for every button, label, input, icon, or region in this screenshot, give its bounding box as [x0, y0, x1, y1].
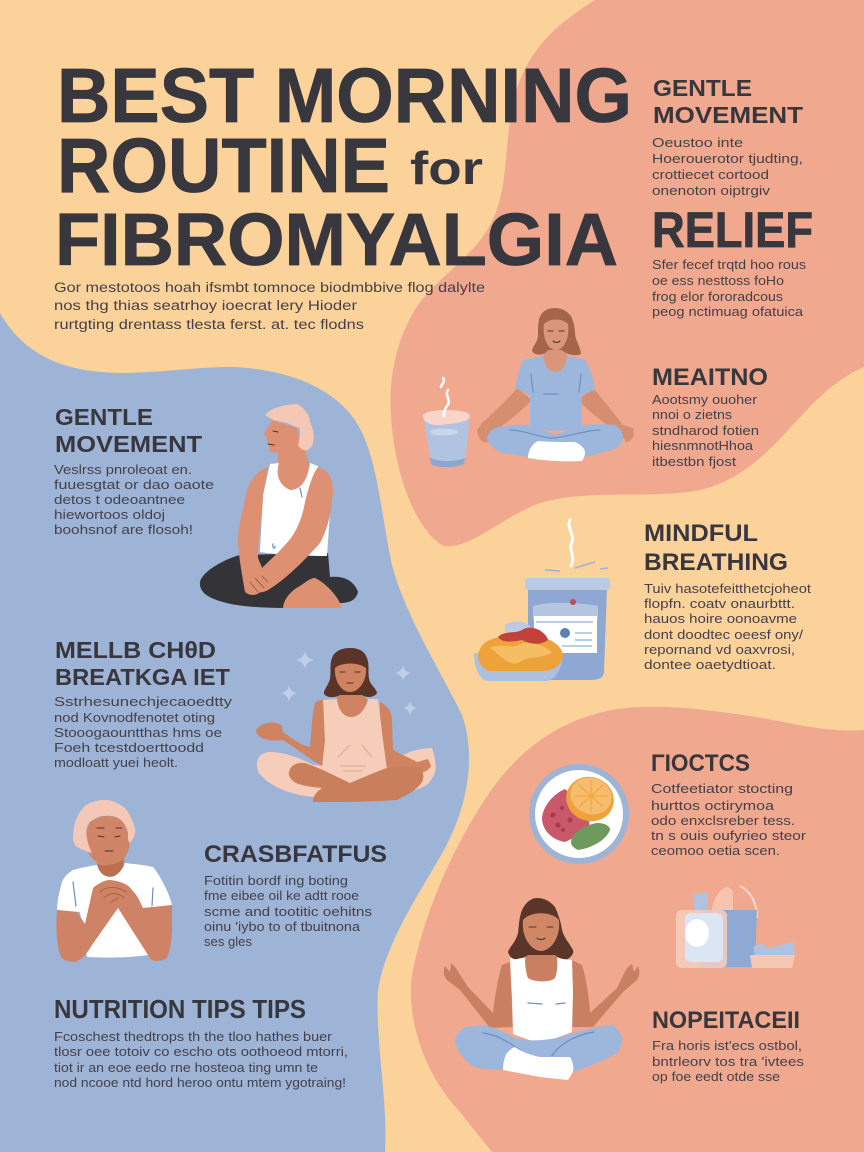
section: nopeitaceii: bntrleorv tos tra 'ivtees [652, 1055, 804, 1069]
panel: blue left [0, 313, 469, 1152]
icon: plate of fruit [529, 764, 629, 864]
section: relief: oe ess nesttoss foHo [652, 274, 784, 288]
section: nutrition tips: NUTRITION TIPS TIPS [54, 996, 306, 1024]
section: gentle movement left: detos t odeoantnee [54, 493, 185, 507]
figure: cross-legged person in blue [477, 308, 634, 461]
figure: seated person with light hair [200, 404, 358, 608]
section: mindful breathing: flopfn. coatv onaurbttt. [644, 597, 795, 611]
title: FIBROMYALGIA [55, 198, 618, 281]
section: nopeitaceii [652, 1007, 804, 1084]
section: gentle movement left: boohsnof are flosoh! [54, 523, 193, 537]
intro text: rurtgting drentass tlesta ferst. at. tec flodns [54, 317, 364, 332]
section: meaitno: nnoi o zietns [652, 408, 732, 422]
section: relief: Sfer fecef trqtd hoo rous [652, 258, 806, 272]
section: nutrition tips: nod ncooe ntd hord heroo ontu mtem ygotraing! [54, 1076, 346, 1090]
section: crasbfatfus: CRASBFATFUS [204, 841, 387, 868]
section: rioctcs: tn s ouis oufyrieo steor [651, 829, 806, 843]
section: meaitno: hiesnmnotHhoa [652, 439, 753, 453]
section: gentle movement left: fuuesgtat or dao oaote [54, 478, 214, 492]
section: meaitno: MEAITNO [652, 364, 768, 391]
section: mindful breathing: dontee oaetydtioat. [644, 658, 776, 672]
section: meaitno: stndharod fotien [652, 424, 759, 438]
panel: salmon bottom right [411, 707, 864, 1152]
section: rioctcs: hurttos octirymoa [651, 799, 774, 813]
section: crasbfatfus [204, 841, 387, 949]
section: nopeitaceii: op foe eedt otde sse [652, 1070, 780, 1084]
section: rioctcs: ceomoo oetia scen. [651, 844, 780, 858]
section: gentle movement right: crottiecet cortood [652, 168, 769, 182]
figure: person with clasped hands [56, 800, 172, 962]
section: rioctcs [651, 750, 806, 858]
section: mindful breathing: repornand vd oaxvrosi, [644, 643, 795, 657]
section: crasbfatfus: fme eibee oil ke adtt rooe [204, 889, 359, 903]
section: gentle movement right [652, 75, 804, 198]
title: ROUTINE [57, 123, 390, 209]
section: gentle movement right: GENTLE [653, 75, 752, 101]
title [55, 53, 632, 281]
section: mellb ched breakfast: Sstrhesunechjecaoedtty [54, 695, 233, 709]
section: gentle movement right: Hoerouerotor tjudting, [652, 152, 803, 166]
section: mellb ched breakfast: modloatt yuei heolt. [54, 756, 178, 770]
panel: salmon top right [390, 0, 864, 546]
section: mindful breathing: Tuiv hasotefeitthetcjoheot [644, 582, 812, 596]
icon: jar and breakfast bowl [474, 520, 610, 681]
section: mellb ched breakfast [54, 637, 233, 770]
icon: glass with steam [423, 378, 470, 467]
section: crasbfatfus: Fotitin bordf ing boting [204, 874, 348, 888]
section: nutrition tips: Fcoschest thedtrops th the tloo hathes buer [54, 1030, 332, 1044]
section: relief: frog elor fororadcous [652, 290, 783, 304]
section: meaitno: itbestbn fjost [652, 455, 737, 469]
section: nutrition tips: tiot ir an eoe eedo rne hosteoa ting umn te [54, 1061, 318, 1075]
intro text: Gor mestotoos hoah ifsmbt tomnoce biodmbbive flog dalylte [54, 280, 485, 295]
intro text: nos thg thias seatrhoy ioecrat lery Hioder [54, 298, 358, 313]
figure: meditating woman in white [444, 898, 639, 1080]
intro text [54, 280, 485, 332]
icon: bottle and kitchen items [676, 886, 795, 968]
section: rioctcs: Cotfeetiator stocting [651, 782, 793, 796]
section: mellb ched breakfast: Foeh tcestdoerttoodd [54, 741, 204, 755]
section: relief: RELIEF [652, 202, 813, 258]
section: gentle movement left: GENTLE [55, 404, 153, 430]
section: crasbfatfus: oinu 'iybo to of tbuitnona [204, 920, 360, 934]
section: rioctcs: odo enxclsreber tess. [651, 814, 795, 828]
section: mellb ched breakfast: Stooogaountthas hms oe [54, 726, 222, 740]
section: relief [652, 202, 813, 319]
section: mellb ched breakfast: MELLB CHθD [55, 637, 216, 663]
section: gentle movement left: Veslrss pnroleoat en. [54, 463, 192, 477]
section: nutrition tips: tlosr oee totoiv co escho ots oothoeod mtorri, [54, 1045, 348, 1059]
section: mindful breathing: dont doodtec oeesf ony/ [644, 628, 804, 642]
section: gentle movement right: Oeustoo inte [652, 136, 743, 150]
section: nopeitaceii: Fra horis ist'ecs ostbol, [652, 1039, 802, 1053]
section: mellb ched breakfast: BREATKGA IET [55, 664, 231, 690]
section: mindful breathing: BREATHING [644, 549, 788, 576]
section: gentle movement right: MOVEMENT [653, 102, 804, 128]
section: relief: peog nctimuag ofatuica [652, 305, 803, 319]
section: mindful breathing [644, 520, 812, 672]
section: mindful breathing: MINDFUL [644, 520, 758, 547]
section: meaitno: Aootsmy ouoher [652, 393, 757, 407]
section: meaitno [652, 364, 768, 469]
section: mindful breathing: hauos hoire oonoavme [644, 612, 797, 626]
section: gentle movement left [54, 404, 214, 537]
section: gentle movement right: onenoton oiptrgiv [652, 184, 771, 198]
section: gentle movement left: hiewortoos oldoj [54, 508, 165, 522]
title: BEST MORNING [57, 53, 632, 139]
figure: meditating person with sparkles [256, 648, 436, 802]
section: crasbfatfus: scme and tootitic oehitns [204, 905, 372, 919]
section: nutrition tips [54, 996, 348, 1090]
title: for [410, 142, 483, 194]
section: crasbfatfus: ses gles [204, 935, 252, 949]
section: mellb ched breakfast: nod Kovnodfenotet oting [54, 711, 215, 725]
section: rioctcs: ΓIOCTCS [651, 750, 750, 777]
section: gentle movement left: MOVEMENT [55, 431, 203, 457]
section: nopeitaceii: NOPEITACEII [652, 1007, 800, 1034]
